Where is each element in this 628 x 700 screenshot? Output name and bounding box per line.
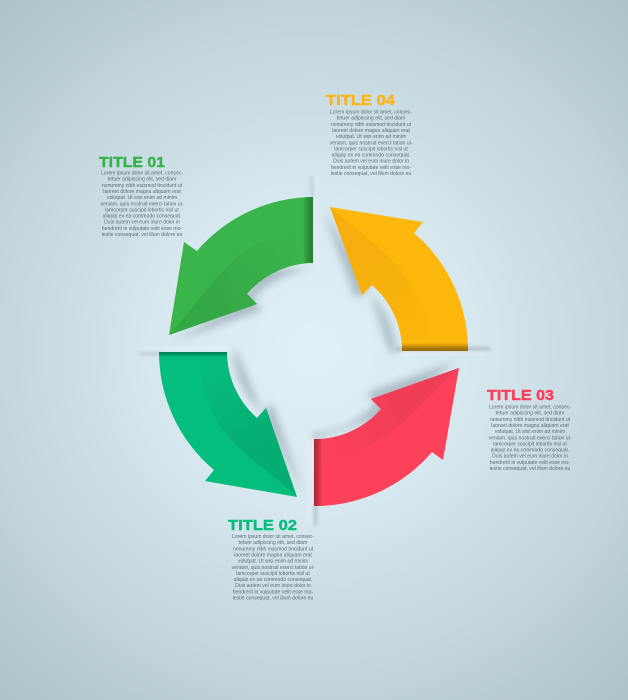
body: title 01: Duis autem vel eum iriure dolor in <box>104 220 180 226</box>
body: title 01: lamcorper suscipit lobortis nisl ut <box>105 207 179 213</box>
body: title 03: volutpat. Ut wisi enim ad minim <box>495 429 565 435</box>
body: title 04: lamcorper suscipit lobortis nisl ut <box>334 146 408 152</box>
body: title 02: lestie consequat, vel illum dolore eu <box>233 596 314 602</box>
body: title 02: hendrerit in vulputate velit esse mo- <box>233 589 314 595</box>
arrow shadows <box>174 212 454 492</box>
text block: title 02 <box>228 518 315 602</box>
heading: title 04: TITLE 04 <box>326 93 395 109</box>
body: title 03: laoreet dolore magna aliquam erat <box>491 423 569 429</box>
body: title 02: veniam, quis nostrud exerci tation ul- <box>232 565 315 571</box>
body: title 03: lestie consequat, vel illum dolore eu <box>490 466 571 472</box>
arrow: green (title 01) <box>169 197 313 335</box>
heading: title 01: TITLE 01 <box>99 155 165 171</box>
body: title 04: lestie consequat, vel illum dolore eu <box>331 171 412 177</box>
body: title 02 <box>232 534 315 602</box>
body: title 03: hendrerit in vulputate velit esse mo- <box>490 460 571 466</box>
arrow: red (title 03) <box>314 368 459 506</box>
body: title 01: hendrerit in vulputate velit esse mo- <box>102 226 183 232</box>
body: title 04: tetuer adipiscing elit, sed diam <box>337 116 405 122</box>
arrow: teal (title 02) <box>159 352 297 497</box>
body: title 03 <box>489 404 572 472</box>
text block: title 03 <box>487 388 572 472</box>
body: title 03: nonummy nibh euismod tincidunt ut <box>490 417 571 423</box>
body: title 03: aliquip ex ea commodo consequat. <box>491 448 569 454</box>
arrow: yellow (title 04) <box>330 207 468 351</box>
body: title 01: volutpat. Ut wisi enim ad minim <box>107 195 177 201</box>
body: title 04: aliquip ex ea commodo consequat. <box>332 153 410 159</box>
body: title 01 <box>101 170 184 238</box>
body: title 01: Lorem ipsum dolor sit amet, consec- <box>101 170 183 176</box>
text block: title 01 <box>99 155 184 238</box>
body: title 03: veniam, quis nostrud exerci tation ul- <box>489 435 572 441</box>
body: title 04: Duis autem vel eum iriure dolor in <box>333 159 409 165</box>
text block: title 04 <box>326 93 413 177</box>
body: title 04: laoreet dolore magna aliquam erat <box>332 128 410 134</box>
body: title 04: veniam, quis nostrud exerci tation ul- <box>330 140 413 146</box>
body: title 01: tetuer adipiscing elit, sed diam <box>108 177 176 183</box>
body: title 01: lestie consequat, vel illum dolore eu <box>102 232 183 238</box>
body: title 04: nonummy nibh euismod tincidunt ut <box>331 122 412 128</box>
heading: title 02: TITLE 02 <box>228 518 297 534</box>
body: title 04 <box>330 110 413 177</box>
body: title 02: Lorem ipsum dolor sit amet, consec- <box>232 534 314 540</box>
body: title 01: aliquip ex ea commodo consequat. <box>103 214 181 220</box>
body: title 02: Duis autem vel eum iriure dolor in <box>235 583 311 589</box>
body: title 02: lamcorper suscipit lobortis nisl ut <box>236 571 310 577</box>
body: title 03: tetuer adipiscing elit, sed diam <box>496 411 564 417</box>
body: title 02: nonummy nibh euismod tincidunt ut <box>233 546 314 552</box>
body: title 01: veniam, quis nostrud exerci tation ul- <box>101 201 184 207</box>
body: title 02: aliquip ex ea commodo consequat. <box>234 577 312 583</box>
heading: title 03: TITLE 03 <box>487 388 554 404</box>
body: title 03: Duis autem vel eum iriure dolor in <box>492 454 568 460</box>
body: title 01: laoreet dolore magna aliquam erat <box>103 189 181 195</box>
body: title 03: lamcorper suscipit lobortis nisl ut <box>493 441 567 447</box>
body: title 04: Lorem ipsum dolor sit amet, consec- <box>330 110 412 116</box>
body: title 04: hendrerit in vulputate velit esse mo- <box>331 165 412 171</box>
body: title 04: volutpat. Ut wisi enim ad minim <box>336 134 406 140</box>
body: title 02: volutpat. Ut wisi enim ad minim <box>238 559 308 565</box>
body: title 03: Lorem ipsum dolor sit amet, consec- <box>489 404 571 410</box>
body: title 02: tetuer adipiscing elit, sed diam <box>239 540 307 546</box>
body: title 02: laoreet dolore magna aliquam erat <box>234 552 312 558</box>
body: title 01: nonummy nibh euismod tincidunt ut <box>102 183 183 189</box>
paper fold slits <box>140 176 490 525</box>
